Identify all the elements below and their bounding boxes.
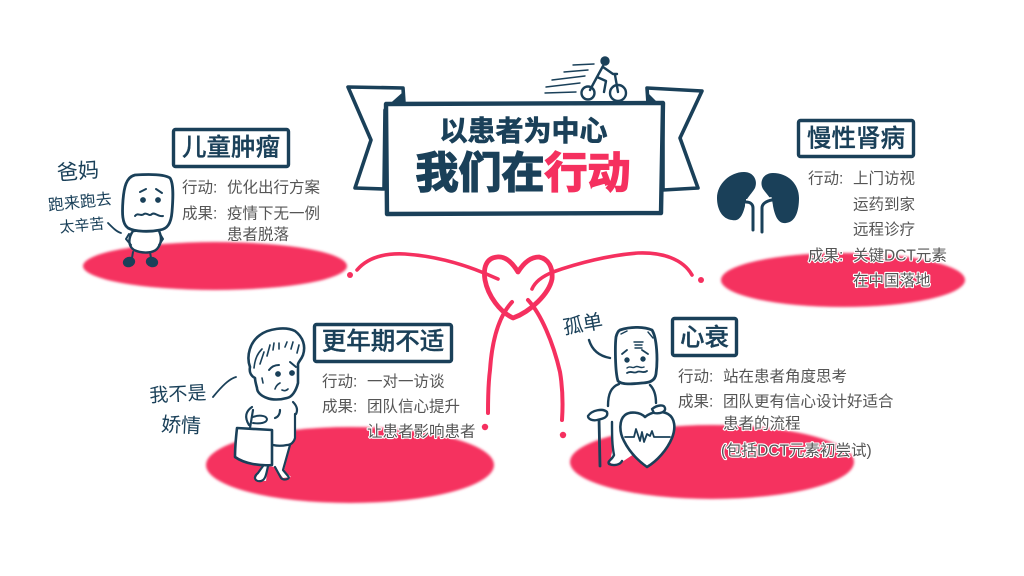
icon: kidneys <box>717 172 799 232</box>
text: 心衰 actions: 患者的流程 <box>723 414 801 432</box>
pink ellipses <box>83 242 965 503</box>
heart knot with ropes <box>347 253 704 438</box>
heading: 更年期不适: 更年期不适 <box>322 328 444 356</box>
text: 更年期不适 actions: 行动: <box>322 372 357 390</box>
text: 更年期不适 actions: 让患者影响患者 <box>367 422 476 440</box>
text: 慢性肾病 actions <box>808 170 947 290</box>
banner title line 2: 我们在行动 <box>416 150 630 198</box>
text: 心衰 actions: 成果: <box>678 392 713 410</box>
text: 更年期不适 actions <box>322 372 476 440</box>
character: woman with bag <box>213 328 304 481</box>
text: 慢性肾病 actions: 上门访视 <box>853 170 915 188</box>
text: 心衰 actions: 站在患者角度思考 <box>723 368 847 386</box>
heading: 慢性肾病 <box>798 120 914 156</box>
text: 慢性肾病 actions: 远程诊疗 <box>853 220 915 238</box>
handwritten: 爸妈跑来跑去太辛苦 <box>47 159 113 236</box>
text: 心衰 actions: 团队更有信心设计好适合 <box>723 392 894 410</box>
text: 心衰 actions: 行动: <box>678 368 713 386</box>
heading: 更年期不适 <box>314 324 452 362</box>
handwritten: 爸妈跑来跑去太辛苦: 太辛苦 <box>59 216 105 236</box>
banner title line 1: 以患者为中心 <box>439 116 608 146</box>
title banner <box>348 87 702 214</box>
text: 慢性肾病 actions: 关键DCT元素 <box>853 246 947 264</box>
heading: 心衰 <box>672 318 736 356</box>
text: 儿童肿瘤 actions: 患者脱落 <box>227 226 290 244</box>
text: 儿童肿瘤 actions <box>182 178 321 244</box>
heading: 儿童肿瘤 <box>174 130 288 166</box>
handwritten: 我不是娇情: 娇情 <box>160 413 202 438</box>
handwritten: 爸妈跑来跑去太辛苦: 爸妈 <box>56 159 100 185</box>
handwritten: 孤单 <box>561 310 610 358</box>
heading: 慢性肾病: 慢性肾病 <box>807 124 905 152</box>
text: 心衰 actions <box>678 368 894 460</box>
banner folds <box>385 92 664 109</box>
text: 慢性肾病 actions: 运药到家 <box>853 196 915 214</box>
text: 更年期不适 actions: 成果: <box>322 398 357 416</box>
text: 儿童肿瘤 actions: 成果: <box>182 204 217 222</box>
character: old man with heart and cane <box>588 327 674 467</box>
character: child <box>108 174 173 267</box>
icon: cyclist <box>545 58 626 101</box>
text: 慢性肾病 actions: 在中国落地 <box>853 272 931 290</box>
text: 心衰 actions: (包括DCT元素初尝试) <box>721 442 872 460</box>
banner right tail <box>647 88 702 190</box>
heading: 心衰: 心衰 <box>680 324 729 352</box>
handwritten: 爸妈跑来跑去太辛苦: 跑来跑去 <box>47 190 113 215</box>
handwritten: 孤单: 孤单 <box>561 310 605 339</box>
text: 慢性肾病 actions: 成果: <box>808 246 843 264</box>
text: 儿童肿瘤 actions: 优化出行方案 <box>227 178 321 196</box>
handwritten: 我不是娇情 <box>149 382 207 438</box>
heading: 儿童肿瘤: 儿童肿瘤 <box>182 134 280 162</box>
text: 更年期不适 actions: 一对一访谈 <box>367 372 445 390</box>
text: 慢性肾病 actions: 行动: <box>808 170 843 188</box>
text: 更年期不适 actions: 团队信心提升 <box>367 398 460 416</box>
banner left tail <box>348 87 404 189</box>
text: 儿童肿瘤 actions: 疫情下无一例 <box>227 204 320 222</box>
banner main panel <box>386 103 663 214</box>
text: 儿童肿瘤 actions: 行动: <box>182 178 217 196</box>
handwritten: 我不是娇情: 我不是 <box>149 382 207 407</box>
